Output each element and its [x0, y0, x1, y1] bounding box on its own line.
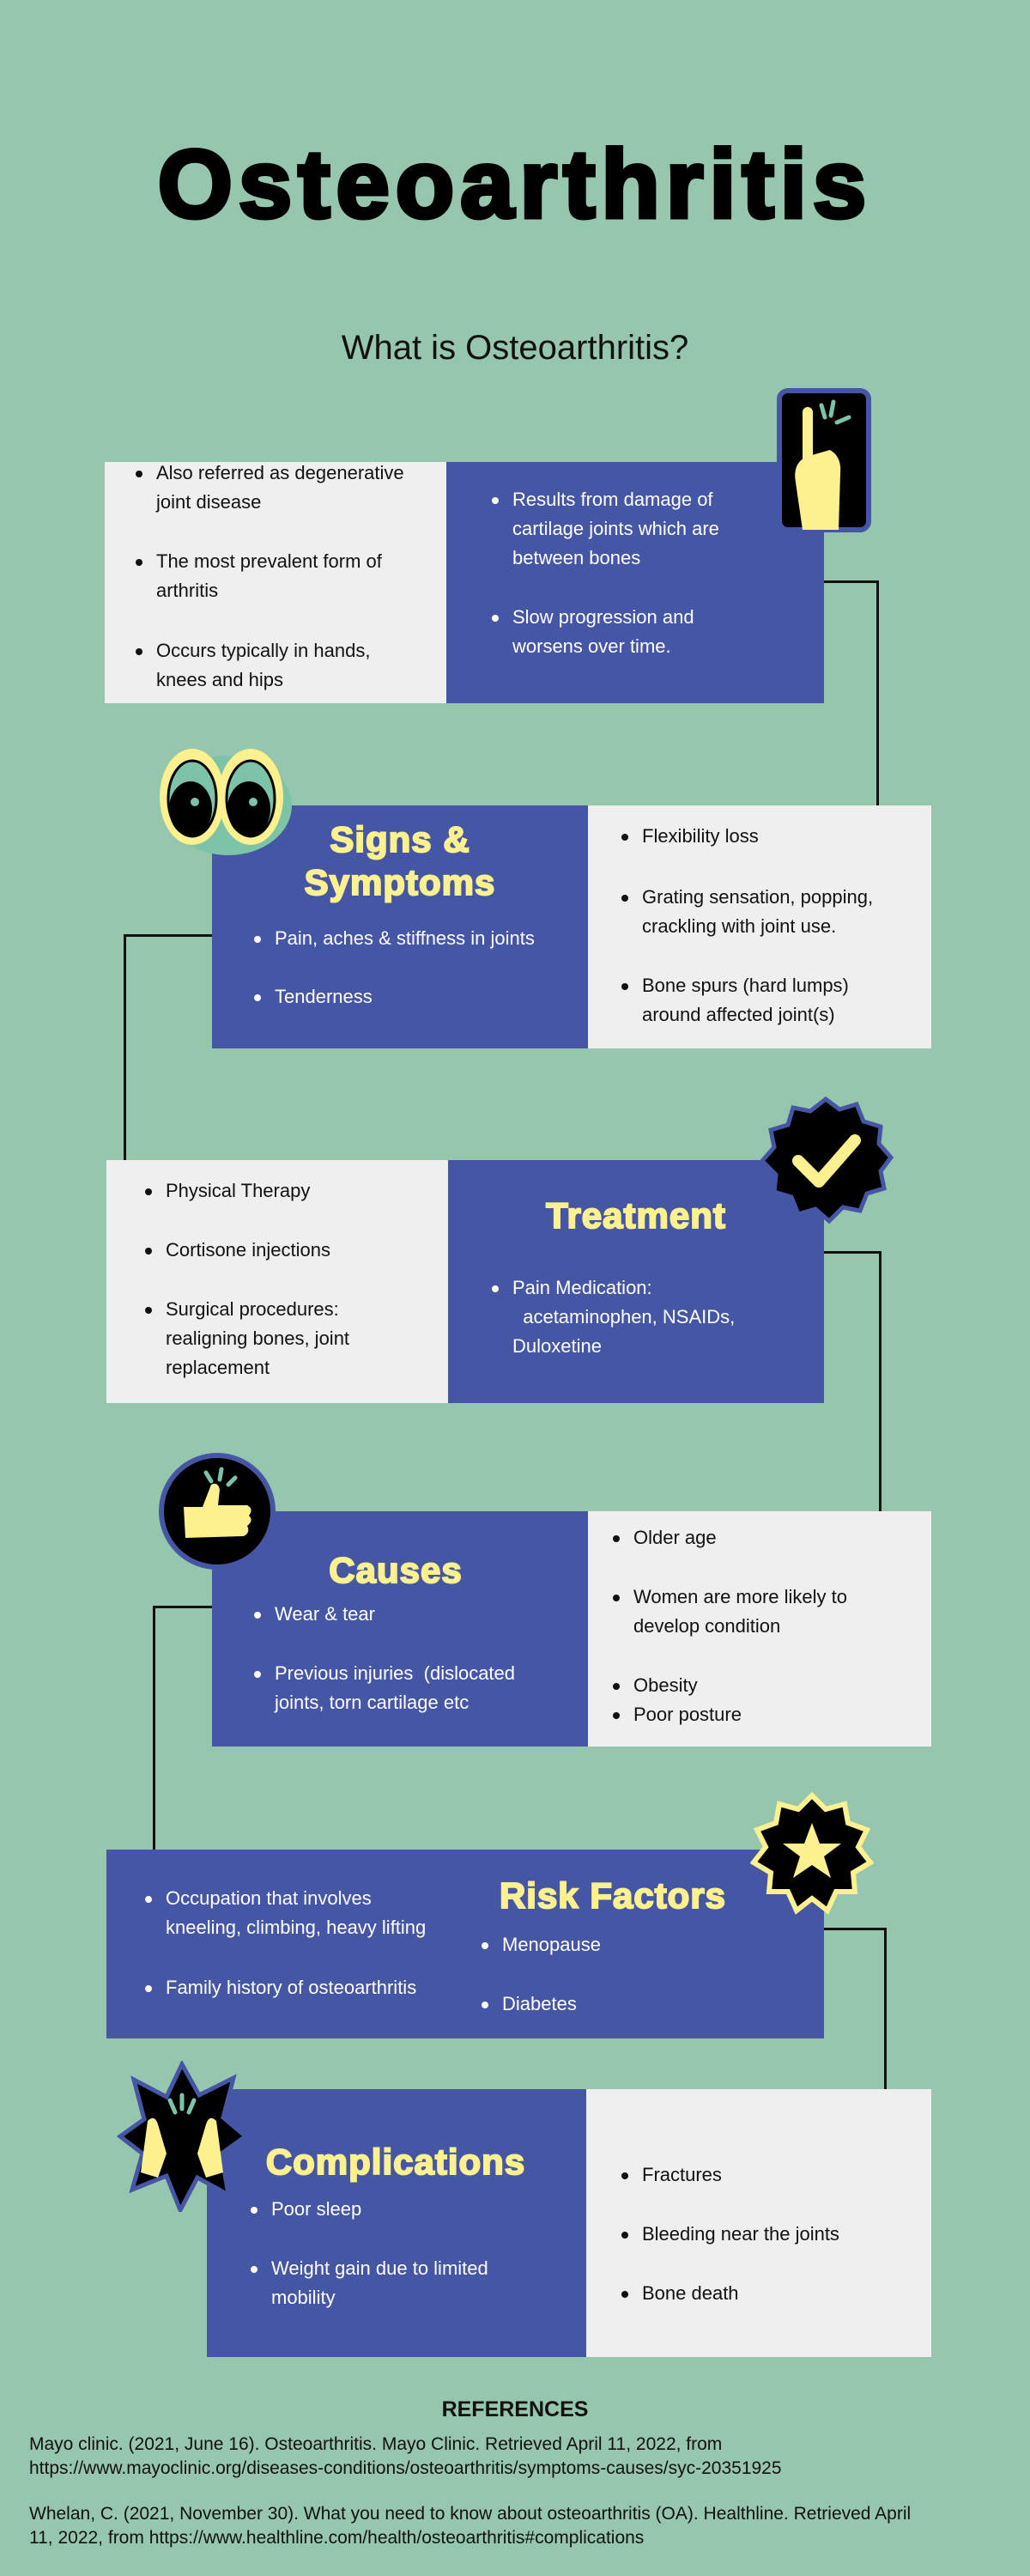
bullet: around affected joint(s) [642, 1004, 835, 1025]
reference 2: 11, 2022, from https://www.healthline.com/health/osteoarthritis#complications [29, 2528, 644, 2548]
bullet: Slow progression and [512, 606, 694, 628]
bullet: crackling with joint use. [642, 915, 836, 937]
bullet: replacement [166, 1357, 270, 1378]
bullet [512, 485, 719, 573]
gray box [588, 805, 931, 1048]
bullet: joints, torn cartilage etc [275, 1692, 469, 1713]
gray box [588, 1511, 931, 1747]
heading: Causes [329, 1550, 463, 1590]
panel: causes [212, 1511, 931, 1747]
bullet [275, 1659, 515, 1717]
blue box [448, 1160, 824, 1403]
blue box [446, 462, 824, 703]
bullet: Obesity [633, 1674, 698, 1696]
icon: eyes [160, 749, 292, 855]
bullet: realigning bones, joint [166, 1327, 349, 1349]
bullet: Pain Medication: [512, 1277, 652, 1298]
subtitle: What is Osteoarthritis? [342, 329, 688, 367]
bullet: Results from damage of [512, 489, 713, 510]
bullet: Surgical procedures: [166, 1298, 339, 1320]
bullet [512, 603, 694, 661]
bullet: Poor posture [633, 1704, 742, 1725]
icon: pointing finger [777, 388, 871, 532]
bullet: Pain, aches & stiffness in joints [275, 927, 535, 949]
bullet: Bone death [642, 2282, 739, 2304]
bullet: Duloxetine [512, 1335, 602, 1357]
heading: Risk Factors [500, 1875, 726, 1916]
bullet: Diabetes [502, 1993, 577, 2014]
reference 1: https://www.mayoclinic.org/diseases-conditions/osteoarthritis/symptoms-causes/syc-20351925 [29, 2458, 782, 2478]
bullet: Cortisone injections [166, 1239, 330, 1261]
bullet: Also referred as degenerative [156, 462, 404, 483]
bullet: Menopause [502, 1934, 601, 1955]
bullet: worsens over time. [512, 635, 671, 657]
panel: signs & symptoms [212, 805, 931, 1048]
blue box [212, 805, 588, 1048]
icon: check badge [760, 1097, 894, 1224]
blue box [106, 1850, 824, 2038]
bullet [271, 2254, 488, 2312]
icon: hands burst [117, 2061, 242, 2212]
bullet: Previous injuries (dislocated [275, 1662, 515, 1684]
bullet: cartilage joints which are [512, 518, 719, 539]
bullet: Family history of osteoarthritis [166, 1977, 416, 1998]
blue box [207, 2089, 586, 2357]
heading: Treatment [546, 1195, 726, 1236]
heading [304, 819, 495, 903]
bullet [633, 1583, 847, 1641]
icon: thumbs up [159, 1453, 276, 1570]
panel: risk factors [106, 1850, 824, 2038]
bullet [156, 636, 370, 695]
bullet: kneeling, climbing, heavy lifting [166, 1917, 426, 1938]
heading: Complications [266, 2142, 525, 2182]
bullet: Flexibility loss [642, 825, 759, 847]
bullet: arthritis [156, 580, 218, 601]
bullet [166, 1295, 349, 1382]
bullet: Wear & tear [275, 1603, 375, 1625]
bullet [166, 1884, 426, 1942]
bullet: Tenderness [275, 986, 373, 1007]
bullet: knees and hips [156, 669, 283, 690]
reference 2: Whelan, C. (2021, November 30). What you need to know about osteoarthritis (OA). Healthline. Retrieved April [29, 2504, 911, 2524]
blue box [212, 1511, 588, 1747]
bullet: develop condition [633, 1615, 780, 1637]
reference 2 [29, 2504, 911, 2548]
references heading: REFERENCES [442, 2397, 588, 2421]
bullet [156, 547, 382, 605]
heading: Symptoms [305, 862, 495, 902]
panel: complications [207, 2089, 931, 2357]
panel: what is [105, 462, 824, 703]
bullet: Occupation that involves [166, 1887, 372, 1909]
bullet [642, 883, 873, 941]
bullet: Physical Therapy [166, 1180, 310, 1201]
bullet: Grating sensation, popping, [642, 886, 873, 908]
bullet: acetaminophen, NSAIDs, [523, 1306, 735, 1327]
bullet [642, 971, 849, 1030]
bullet [512, 1273, 735, 1361]
reference 1: Mayo clinic. (2021, June 16). Osteoarthritis. Mayo Clinic. Retrieved April 11, 2022, from [29, 2434, 722, 2454]
bullet: Poor sleep [271, 2198, 361, 2220]
bullet: mobility [271, 2287, 336, 2308]
bullet: The most prevalent form of [156, 550, 382, 572]
title: Osteoarthritis [158, 131, 872, 238]
reference 1 [29, 2434, 782, 2478]
bullet: Older age [633, 1527, 717, 1548]
icon: star badge [750, 1792, 874, 1915]
panel: treatment [106, 1160, 824, 1403]
bullet: Bone spurs (hard lumps) [642, 975, 849, 996]
gray box [106, 1160, 448, 1403]
bullet: Women are more likely to [633, 1586, 847, 1607]
bullet: Fractures [642, 2164, 722, 2185]
bullet [156, 459, 404, 517]
bullet: joint disease [156, 491, 261, 513]
bullet: Bleeding near the joints [642, 2223, 839, 2245]
gray box [105, 462, 446, 703]
gray box [586, 2089, 931, 2357]
heading: Signs & [330, 819, 470, 860]
bullet: Occurs typically in hands, [156, 640, 370, 661]
bullet: between bones [512, 547, 640, 568]
bullet: Weight gain due to limited [271, 2257, 488, 2279]
